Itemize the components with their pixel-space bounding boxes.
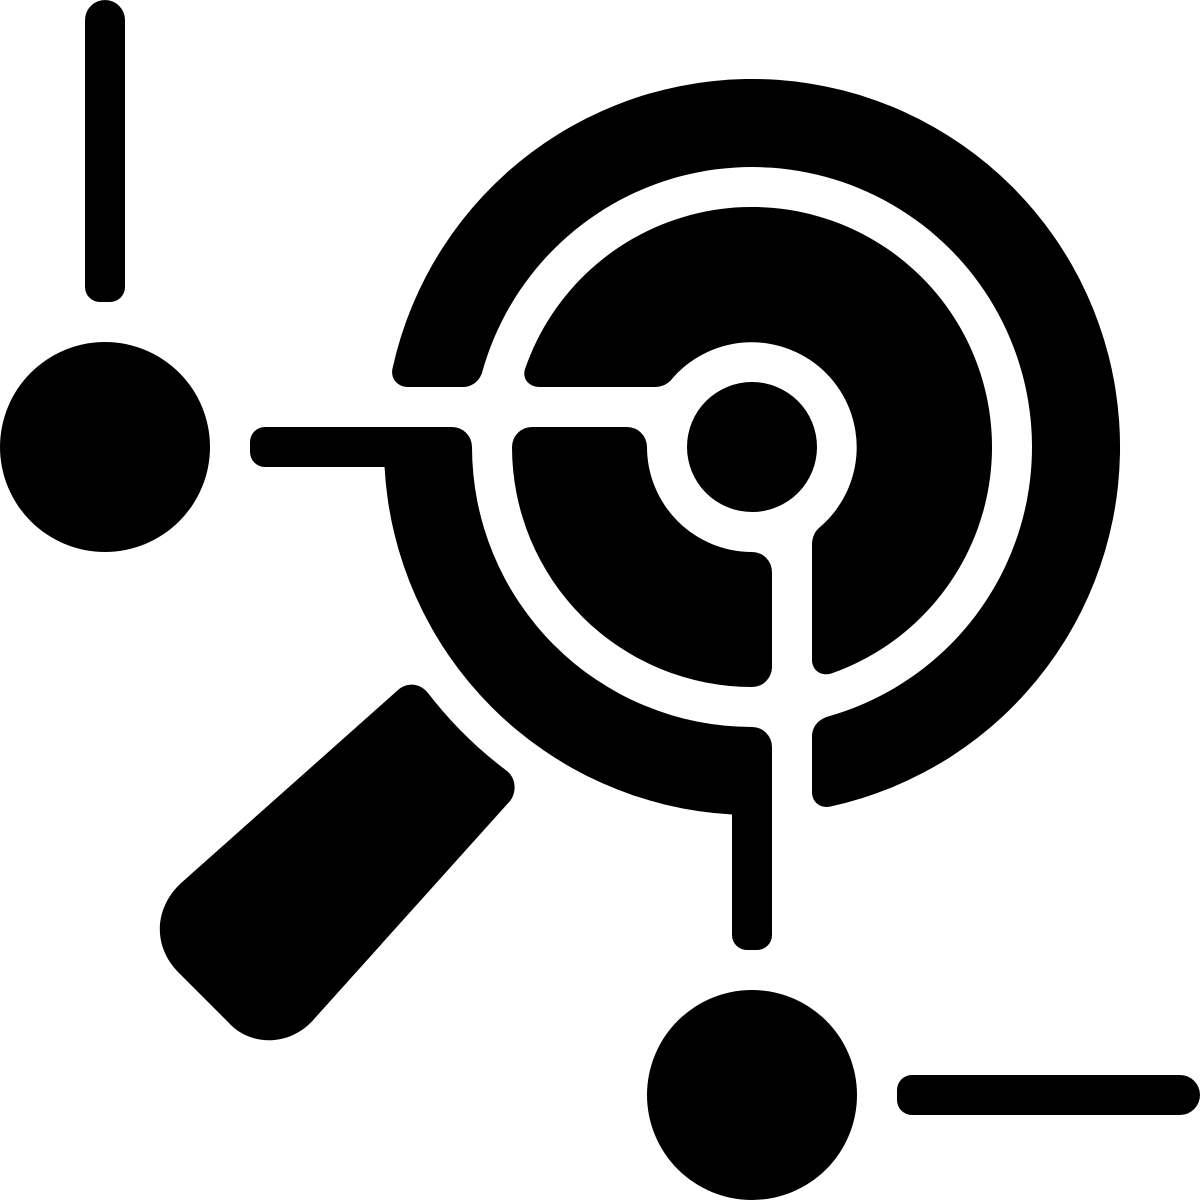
- icon: inner target disk lower left segment: [512, 427, 772, 687]
- icon: top-left vertical bar: [85, 0, 125, 302]
- icon: bottom-right horizontal bar: [897, 1075, 1200, 1115]
- icon: outer target ring arc: [392, 79, 1120, 807]
- icon: inner target disk upper right segment: [524, 207, 992, 674]
- icon: connector ring arc with left and bottom leads: [250, 427, 772, 950]
- icon: bottom node circle: [647, 990, 857, 1200]
- icon: target center dot: [687, 382, 817, 512]
- icon: left node circle: [0, 342, 210, 552]
- icon: magnifier handle: [160, 685, 515, 1040]
